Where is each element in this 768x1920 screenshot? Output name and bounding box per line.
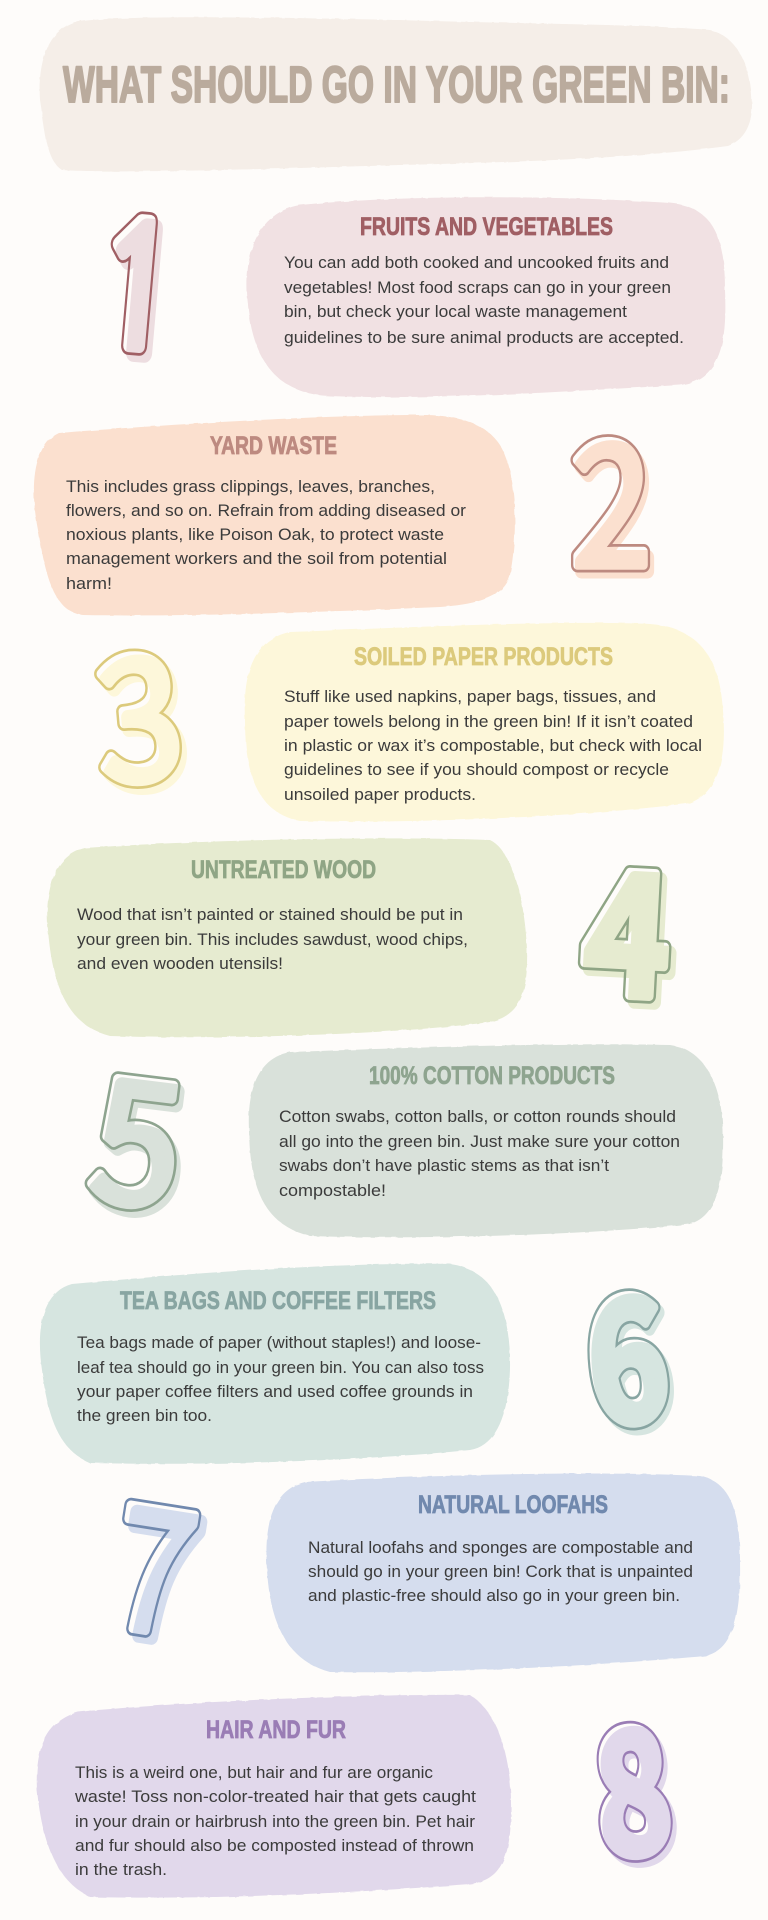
body text: unsoiled paper products.	[284, 785, 476, 804]
number 2	[570, 434, 654, 578]
number 8	[596, 1720, 677, 1868]
body text: This is a weird one, but hair and fur are organic	[75, 1763, 433, 1782]
panel background	[245, 623, 724, 822]
body text: harm!	[66, 574, 112, 593]
heading: UNTREATED WOOD	[191, 856, 376, 884]
heading: HAIR AND FUR	[206, 1716, 346, 1744]
body text: waste! Toss non-color-treated hair that gets caught	[74, 1787, 476, 1806]
heading: YARD WASTE	[210, 432, 337, 460]
number 1: 1	[93, 209, 189, 383]
number 5	[84, 1071, 185, 1218]
heading: FRUITS AND VEGETABLES	[360, 213, 613, 241]
body text: the green bin too.	[77, 1406, 212, 1425]
number 3	[94, 648, 187, 795]
panel 7: natural loofahs	[266, 1474, 740, 1672]
body text	[77, 905, 468, 973]
body text	[66, 477, 466, 593]
body text: management workers and the soil from potential	[66, 549, 447, 568]
number 6	[587, 1288, 674, 1436]
title background blob	[40, 17, 752, 171]
panel 2: yard waste	[34, 415, 515, 615]
heading: TEA BAGS AND COFFEE FILTERS	[120, 1287, 436, 1315]
number 2: 2	[575, 374, 655, 620]
heading: 100% COTTON PRODUCTS	[369, 1062, 615, 1090]
body text	[279, 1107, 680, 1200]
number 8: 8	[588, 1658, 684, 1910]
panel background	[47, 838, 527, 1037]
body text	[74, 1763, 476, 1879]
number 7	[122, 1498, 208, 1645]
panel background	[37, 1695, 511, 1898]
panel 6: tea bags and coffee filters	[40, 1264, 510, 1464]
body text: and fur should also be composted instead of thrown	[75, 1836, 474, 1855]
body text	[308, 1538, 693, 1605]
number 1	[110, 211, 163, 363]
number 5: 5	[84, 1007, 201, 1262]
body text: all go into the green bin. Just make sure your cotton	[279, 1132, 680, 1151]
body text: your green bin. This includes sawdust, wood chips,	[77, 930, 468, 949]
body text: leaf tea should go in your green bin. You can also toss	[77, 1358, 484, 1377]
panel background	[34, 415, 515, 615]
body text: This includes grass clippings, leaves, branches,	[66, 477, 435, 496]
body text: Tea bags made of paper (without staples!) and loose-	[77, 1333, 481, 1352]
body text: bin, but check your local waste management	[284, 302, 627, 321]
number 6: 6	[577, 1226, 682, 1479]
body text: You can add both cooked and uncooked fruits and	[284, 253, 669, 272]
panel 1: fruits and vegetables	[247, 197, 725, 397]
body text: in the trash.	[75, 1860, 167, 1879]
body text: Wood that isn’t painted or stained should be put in	[77, 905, 463, 924]
body text: compostable!	[279, 1181, 386, 1200]
panel 8: hair and fur	[37, 1695, 511, 1898]
body text	[284, 253, 684, 347]
body text: should go in your green bin! Cork that is unpainted	[308, 1562, 693, 1581]
panel background	[266, 1474, 740, 1672]
number 4: 4	[582, 802, 682, 1052]
body text: and even wooden utensils!	[77, 954, 283, 973]
heading: NATURAL LOOFAHS	[418, 1491, 608, 1519]
body text: guidelines to see if you should compost or recycle	[284, 760, 669, 779]
heading: SOILED PAPER PRODUCTS	[354, 643, 613, 671]
body text: noxious plants, like Poison Oak, to protect waste	[66, 525, 444, 544]
body text	[77, 1333, 484, 1425]
number 3: 3	[90, 585, 196, 837]
body text: and plastic-free should also go in your green bin.	[308, 1586, 680, 1605]
body text: guidelines to be sure animal products are accepted.	[284, 328, 684, 347]
body text: paper towels belong in the green bin! If it isn’t coated	[284, 712, 693, 731]
body text: in your drain or hairbrush into the green bin. Pet hair	[75, 1812, 475, 1831]
body text: Natural loofahs and sponges are compostable and	[308, 1538, 693, 1557]
panel 4: untreated wood	[47, 838, 527, 1037]
number 7: 7	[103, 1436, 219, 1692]
body text: Stuff like used napkins, paper bags, tissues, and	[284, 687, 656, 706]
number 4	[578, 865, 676, 1010]
body text	[284, 687, 702, 804]
body text: your paper coffee filters and used coffee grounds in	[77, 1382, 473, 1401]
panel 3: soiled paper products	[245, 623, 724, 822]
panel background	[249, 1044, 723, 1237]
body text: swabs don’t have plastic stems as that isn’t	[279, 1156, 609, 1175]
panel background	[40, 1264, 510, 1464]
panel 5: cotton products	[249, 1044, 723, 1237]
body text: flowers, and so on. Refrain from adding diseased or	[66, 501, 466, 520]
panel background	[247, 197, 725, 397]
title panel	[40, 17, 752, 171]
body text: Cotton swabs, cotton balls, or cotton rounds should	[279, 1107, 676, 1126]
body text: vegetables! Most food scraps can go in your green	[284, 278, 671, 297]
body text: in plastic or wax it’s compostable, but check with local	[284, 736, 702, 755]
